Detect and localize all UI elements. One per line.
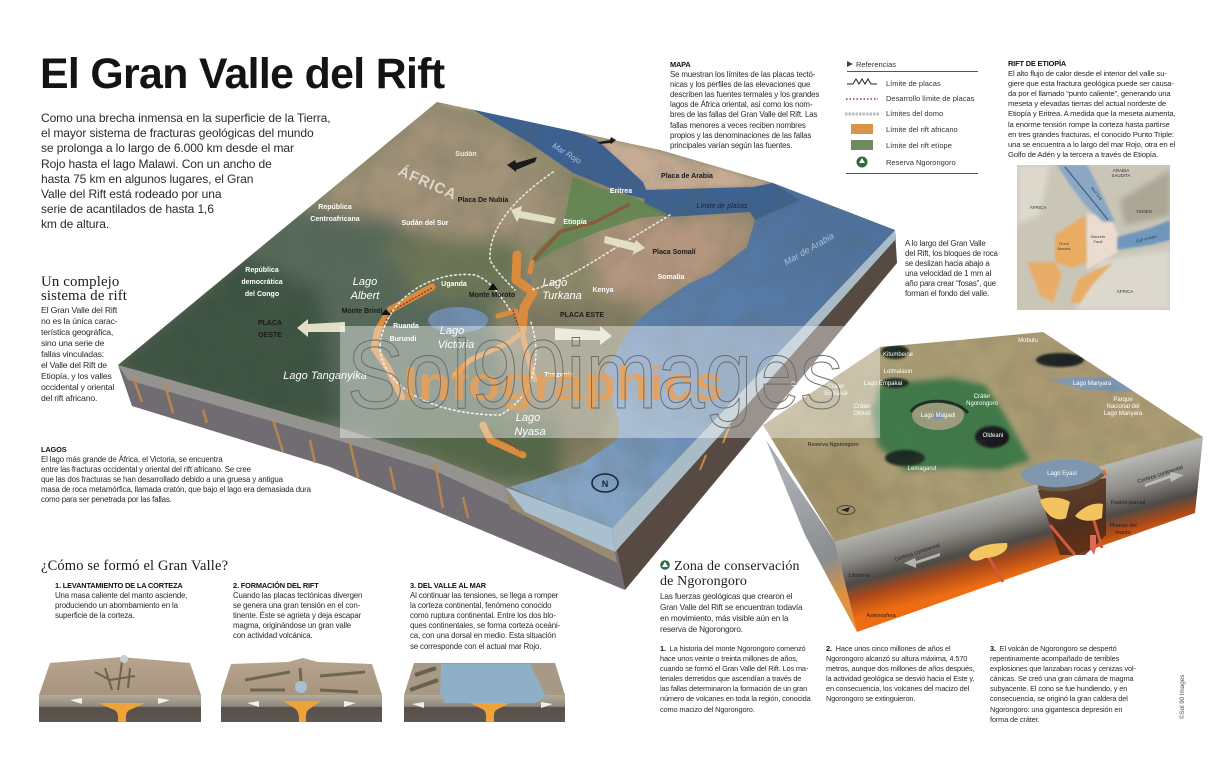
complex rift text: sino una serie de — [41, 338, 104, 348]
Ngorongoro step 2: en consecuencia, los volcanes del macizo del — [826, 684, 969, 693]
arrow: Somali — [604, 236, 645, 255]
map text: principales varían según las fuentes. — [670, 141, 792, 150]
map labels: Centroafricana — [310, 216, 360, 223]
legend: plate limit: Límite de placas — [886, 79, 941, 88]
Ngorongoro labels: manto — [1115, 530, 1131, 536]
Ngorongoro labels: Litosfera — [848, 573, 870, 579]
map labels: Mar Rojo — [551, 141, 583, 166]
Ngorongoro step 1: 1. La historia del monte Ngorongoro comenzó — [660, 644, 806, 653]
complex rift text: el Valle del Rift de — [41, 360, 107, 370]
Red Sea — [472, 110, 646, 199]
Ethiopia rift text: El alto flujo de calor desde el interior del valle su- — [1008, 69, 1167, 78]
map labels: Nyasa — [514, 426, 546, 438]
map text: describen las fuentes termales y los grandes — [670, 90, 819, 99]
dark arrows — [507, 137, 616, 172]
map text: fallas menores a veces reciben nombres — [670, 121, 806, 130]
dome limits — [380, 172, 670, 415]
map labels: Placa de Arabia — [661, 173, 713, 180]
step 2 text: tinente. Éste se agrieta y deja escapar — [233, 611, 361, 620]
Ngorongoro intro: en movimiento, más visible aún en la — [660, 614, 788, 623]
arrow: east plate — [555, 326, 612, 345]
intro text: km de altura. — [41, 217, 109, 231]
lakes text: masa de roca metamórfica, llamada cratón, que bajo el lago era demasiada dura — [41, 485, 311, 494]
Ngorongoro labels: Lago Empakai — [864, 381, 902, 387]
Ngorongoro labels: Mobulu — [1018, 338, 1038, 344]
step 1 text: superficie de la corteza. — [55, 611, 134, 620]
plate arrows — [297, 206, 645, 345]
map labels: Eritrea — [610, 188, 632, 195]
step 1 text: 1. LEVANTAMIENTO DE LA CORTEZA — [55, 581, 183, 590]
inset map: Ethiopia rift: YEMEN — [1136, 209, 1152, 214]
map labels: Límite de placas — [697, 203, 748, 210]
Ngorongoro intro — [660, 592, 803, 634]
complex rift text: occidental y oriental — [41, 382, 114, 392]
Ngorongoro step 3: subyacente. El cono se fue hundiendo, y en — [990, 684, 1127, 693]
intro text: el mayor sistema de fracturas geológicas del mundo — [41, 126, 314, 140]
map block left face — [118, 365, 625, 590]
inset map: Ethiopia rift: ARABIA — [1113, 168, 1129, 173]
lakes text: entre las fracturas occidental y oriental del rift africano. Se cree — [41, 465, 251, 474]
Ngorongoro labels: Olmoti — [853, 411, 871, 417]
Lake Victoria — [428, 307, 488, 333]
Ngorongoro labels: Ngorongoro — [966, 401, 999, 407]
block 1: crust uplift — [39, 655, 201, 722]
step 3 text: ques continentales, se forma corteza oceáni- — [410, 621, 560, 630]
Ngorongoro step 1 — [660, 644, 811, 714]
map labels: Mar de Arabia — [782, 231, 836, 267]
arrow: Nubia — [511, 206, 556, 224]
map labels: Placa Somalí — [652, 249, 697, 256]
lakes text: LAGOS — [41, 445, 66, 454]
Ngorongoro labels: Reserva Ngorongoro — [807, 442, 859, 448]
map surface — [100, 90, 910, 540]
credit: ©Sol 90 Images — [1179, 675, 1186, 719]
Ethiopia rift text: Etiopía y Eritrea. A medida que la meseta aumenta, — [1008, 109, 1176, 118]
inset map: Ethiopia rift: Basalts — [1057, 246, 1071, 251]
intro text: Rojo hasta el lago Malawi. Con un ancho de — [41, 157, 272, 171]
watermark: Sol90images — [347, 320, 843, 429]
map labels: Monte Moroto — [469, 292, 515, 299]
arrow: west plate — [297, 319, 345, 337]
step 2 text: se genera una gran tensión en el con- — [233, 601, 360, 610]
Ngorongoro labels: Lolmalasin — [884, 369, 912, 375]
step 2 text: Cuando las placas tectónicas divergen — [233, 591, 362, 600]
step 3 text: como ruptura continental. Entre los dos blo- — [410, 611, 556, 620]
callout: rock blocks: forman el fondo del valle. — [905, 289, 989, 298]
map labels: Uganda — [441, 281, 467, 288]
inset map: Ethiopia rift: ÁFRICA — [1030, 204, 1046, 210]
map labels: Lago Tanganyika — [283, 370, 367, 382]
Ethiopia rift text — [1008, 59, 1176, 159]
map labels — [241, 141, 836, 438]
map labels: Sudán del Sur — [401, 220, 449, 227]
Ngorongoro step 3: repentinamente acompañado de terribles — [990, 654, 1119, 663]
step 2 text: con actividad volcánica. — [233, 631, 313, 640]
Ngorongoro step 1: teriales derretidos que ascendían a través de — [660, 674, 801, 683]
step 3 text: 3. DEL VALLE AL MAR — [410, 581, 486, 590]
Ngorongoro labels — [791, 338, 1184, 619]
complex rift text: El Gran Valle del Rift — [41, 305, 117, 315]
inset map: Ethiopia rift: Fault — [1094, 239, 1103, 244]
map labels: Albert — [350, 290, 380, 302]
step 2 text: magma, originándose un gran valle — [233, 621, 351, 630]
Ngorongoro labels: Astenosfera — [866, 613, 897, 619]
inset map: Ethiopia rift: Discrete — [1091, 234, 1106, 239]
inset map: Ethiopia rift — [1017, 165, 1170, 310]
inset map: Ethiopia rift: Red Sea — [1090, 186, 1104, 201]
Ngorongoro step 3: explosiones que lanzaban rocas y cenizas vol- — [990, 664, 1136, 673]
Ngorongoro step 1: cuando se formó el Gran Valle del Rift. Los ma- — [660, 664, 808, 673]
Ngorongoro block — [755, 325, 1210, 632]
block 3: valley to sea — [404, 663, 565, 722]
Ngorongoro step 2: la actividad geológica se desvió hacia el Este y, — [826, 674, 974, 683]
Ngorongoro labels: Lago Manyara — [1073, 381, 1112, 387]
Ngorongoro step 3: consecuencia, se originó la gran caldera del — [990, 694, 1128, 703]
legend: Ethiopian rift: Límite del rift etíope — [886, 141, 952, 150]
Ngorongoro step 1: las fallas determinaron la formación de un gran — [660, 684, 807, 693]
map labels: Kenya — [592, 287, 614, 294]
Ethiopia rift text: RIFT DE ETIOPÍA — [1008, 59, 1066, 68]
map labels: democrática — [241, 279, 283, 286]
main map block — [100, 90, 910, 590]
legend: African rift: Límite del rift africano — [886, 125, 958, 134]
Lake Eyasi — [1020, 459, 1103, 489]
Ngorongoro step 3: cánicas. Se creó una gran cámara de magma — [990, 674, 1133, 683]
volcano cross-section — [969, 472, 1106, 582]
Ethiopia rift text: la enorme tensión rompe la corteza hasta partirse — [1008, 120, 1170, 129]
map labels: del Congo — [245, 291, 279, 298]
Ethiopia rift text: meseta y elevadas tierras del actual nordeste de — [1008, 99, 1166, 108]
complex rift text: no es la única carac- — [41, 316, 118, 326]
Ngorongoro labels: Lago Eyasi — [1047, 471, 1077, 477]
volcano markers — [381, 283, 498, 315]
surface — [755, 325, 1210, 550]
heading: complex rift: Un complejo — [41, 274, 119, 290]
step 3 text: ca, con una dorsal en medio. Esta situación — [410, 631, 556, 640]
small compass — [837, 506, 855, 514]
Ngorongoro labels: Lemagarut — [908, 466, 937, 472]
map labels: ÁFRICA — [395, 163, 460, 204]
Ngorongoro labels: Cráter — [854, 404, 870, 410]
map text: MAPA — [670, 60, 691, 69]
Ethiopia rift text: da por el llamado “punto caliente”, generando una — [1008, 89, 1171, 98]
map labels: PLACA — [258, 320, 282, 327]
Ngorongoro labels: Lago Magadi — [921, 413, 955, 419]
intro text: se prolonga a lo largo de 6.000 km desde el mar — [41, 141, 294, 155]
callout: rock blocks: del Rift, los bloques de roca — [905, 249, 998, 258]
Ngorongoro step 3 — [990, 644, 1136, 724]
complex rift text: fallas vinculadas: — [41, 349, 104, 359]
step 3 text — [410, 581, 560, 651]
Ngorongoro labels: Oldoinyo — [791, 382, 816, 388]
map labels: Tanzania — [544, 372, 574, 379]
legend: dome limits: Límites del domo — [886, 109, 943, 118]
intro text: hasta 75 km en algunos lugares, el Gran — [41, 172, 253, 186]
complex rift text: Etiopía, y los valles — [41, 371, 112, 381]
lakes text: que las dos fracturas se han desarrollado debido a una gruesa y antigua — [41, 475, 283, 484]
map labels: Lago — [440, 325, 464, 337]
Ngorongoro step 3: Ngorongoro: una gigantesca depresión en — [990, 705, 1122, 714]
map block right face — [612, 230, 897, 590]
callout: rock blocks: año para crear “fosas”, que — [905, 279, 996, 288]
map labels: Lago — [543, 277, 567, 289]
Ngorongoro labels: Lago Manyara — [1104, 411, 1143, 417]
map labels: Victoria — [438, 339, 474, 351]
map labels: Burundi — [390, 336, 416, 343]
map labels: Sudán — [455, 151, 477, 158]
Ngorongoro step 3: 3. El volcán de Ngorongoro se despertó — [990, 644, 1117, 653]
map text: propios y las denominaciones de las fallas — [670, 131, 811, 140]
title: El Gran Valle del Rift — [40, 50, 444, 98]
African rift — [374, 255, 535, 455]
block faces — [766, 437, 1203, 632]
intro text: Valle del Rift está rodeado por una — [41, 187, 221, 201]
map labels: Monte Brinti — [342, 308, 382, 315]
Ethiopia rift text: giere que esta fractura geológica puede ser causa- — [1008, 79, 1174, 88]
map labels: Turkana — [542, 290, 582, 302]
Ngorongoro intro: Las fuerzas geológicas que crearon el — [660, 592, 792, 601]
callout: rock blocks: se deslizan hacia abajo a — [905, 259, 990, 268]
compass — [592, 474, 618, 492]
heading: Ngorongoro: de Ngorongoro — [660, 574, 747, 588]
Ngorongoro labels: Cráter — [828, 384, 844, 390]
heading: complex rift: sistema de rift — [41, 288, 127, 304]
Ngorongoro labels: Nacional del — [1106, 404, 1140, 410]
map labels: Somalia — [658, 274, 685, 281]
Ngorongoro step 1: como macizo del Ngorongoro. — [660, 705, 755, 714]
watermark: Infographics — [403, 358, 723, 411]
Ngorongoro labels: Kitumbeine — [883, 352, 914, 358]
intro text: Como una brecha inmensa en la superficie de la Tierra, — [41, 111, 330, 125]
block 2: rift formation — [221, 658, 382, 722]
lakes text — [41, 445, 311, 504]
step 2 text: 2. FORMACIÓN DEL RIFT — [233, 581, 319, 590]
step 3 text: Al continuar las tensiones, se llega a romper — [410, 591, 558, 600]
heading: Ngorongoro — [660, 559, 800, 588]
Ethiopia rift text: en tres grandes fracturas, el conocido Punto Triple: — [1008, 130, 1174, 139]
callout: rock blocks: una velocidad de 1 mm al — [905, 269, 991, 278]
Ngorongoro step 2: metros, aunque dos millones de años después, — [826, 664, 974, 673]
map text: nicas y los perfiles de las elevaciones que — [670, 80, 810, 89]
map labels: República — [318, 204, 352, 211]
Ngorongoro step 3: forma de cráter. — [990, 715, 1039, 724]
Ethiopian rift — [530, 177, 670, 267]
map text: lagos de África oriental, así como los nom- — [670, 100, 812, 109]
legend: reserve: Reserva Ngorongoro — [886, 158, 956, 167]
map text: bres de las fallas del Gran Valle del Rift. Las — [670, 110, 817, 119]
legend: Referencias — [856, 60, 896, 69]
Ngorongoro step 2: Ngorongoro se extinguieron. — [826, 694, 915, 703]
Ngorongoro labels: Corteza continental — [894, 543, 941, 563]
inset map: Ethiopia rift: Gulf of Aden — [1135, 233, 1158, 244]
small arrows — [904, 472, 1184, 568]
map labels: Ruanda — [393, 323, 419, 330]
Arabian Sea — [510, 183, 897, 530]
icon: reserve heading — [660, 560, 670, 570]
Gulf of Aden — [643, 183, 800, 220]
inset map: Ethiopia rift: SAUDITA — [1111, 173, 1131, 178]
inset map: Ethiopia rift: Flood — [1059, 241, 1069, 246]
Ngorongoro step 2: Ngorongoro alcanzó su altura máxima, 4.570 — [826, 654, 967, 663]
Ngorongoro labels: Oldeani — [983, 433, 1003, 439]
callout: rock blocks: A lo largo del Gran Valle — [905, 239, 986, 248]
complex rift text — [41, 305, 118, 403]
legend — [845, 60, 978, 174]
Ngorongoro labels: Corteza continental — [1137, 465, 1184, 485]
intro text: serie de acantilados de hasta 1,6 — [41, 202, 214, 216]
map text: Se muestran los límites de las placas tectó- — [670, 70, 815, 79]
compass: N — [602, 479, 608, 489]
map labels: Lago — [516, 412, 540, 424]
map labels: OESTE — [258, 332, 282, 339]
step 1 text: Una masa caliente del manto asciende, — [55, 591, 187, 600]
Ngorongoro step 2: 2. Hace unos cinco millones de años el — [826, 644, 950, 653]
Ngorongoro labels: Parque — [1113, 397, 1133, 403]
lakes text: como para ser penetrada por las fallas. — [41, 495, 172, 504]
intro text — [41, 111, 330, 231]
Ngorongoro labels: Lengai — [794, 389, 812, 395]
Ngorongoro labels: Fusión parcial — [1111, 500, 1145, 506]
inset map: Ethiopia rift: ÁFRICA — [1117, 288, 1133, 294]
step 1 text — [55, 581, 187, 620]
Ngorongoro labels: Plumas del — [1109, 523, 1137, 529]
lakes text: El lago más grande de África, el Victoria, se encuentra — [41, 455, 223, 464]
complex rift text: terística geográfica, — [41, 327, 113, 337]
Ngorongoro step 1: hace unos veinte o treinta millones de años, — [660, 654, 798, 663]
Ngorongoro labels: Cráter — [974, 394, 990, 400]
legend: plate limit development: Desarrollo límite de placas — [886, 94, 975, 103]
complex rift text: del rift africano. — [41, 393, 97, 403]
heading: complex rift — [41, 274, 127, 304]
map labels: Lago — [353, 276, 377, 288]
map labels: PLACA ESTE — [560, 312, 604, 319]
Ngorongoro intro: Gran Valle del Rift se encuentran todavía — [660, 603, 802, 612]
map labels: Etiopía — [563, 219, 587, 226]
step 2 text — [233, 581, 362, 640]
callout: rock blocks — [905, 239, 998, 298]
step 1 text: produciendo un abombamiento en la — [55, 601, 178, 610]
Ngorongoro step 1: número de volcanes en toda la región, conocida — [660, 694, 811, 703]
heading: Ngorongoro: Zona de conservación — [674, 559, 800, 574]
Ethiopia rift text: Golfo de Adén y la tercera a través de Etiopía. — [1008, 150, 1158, 159]
heading: how it formed: ¿Cómo se formó el Gran Valle? — [41, 558, 228, 574]
Ethiopia rift text: una se encuentra a lo largo del mar Rojo, otra en el — [1008, 140, 1175, 149]
step 3 text: la corteza continental, fenómeno conocido — [410, 601, 551, 610]
Ngorongoro labels: Embakai — [824, 391, 848, 397]
map labels: Placa De Nubia — [458, 197, 508, 204]
Ngorongoro intro: reserva de Ngorongoro. — [660, 625, 743, 634]
map labels: República — [245, 267, 279, 274]
Ngorongoro step 2 — [826, 644, 974, 703]
map text — [670, 60, 820, 150]
step 3 text: se corresponde con el actual mar Rojo. — [410, 642, 541, 651]
